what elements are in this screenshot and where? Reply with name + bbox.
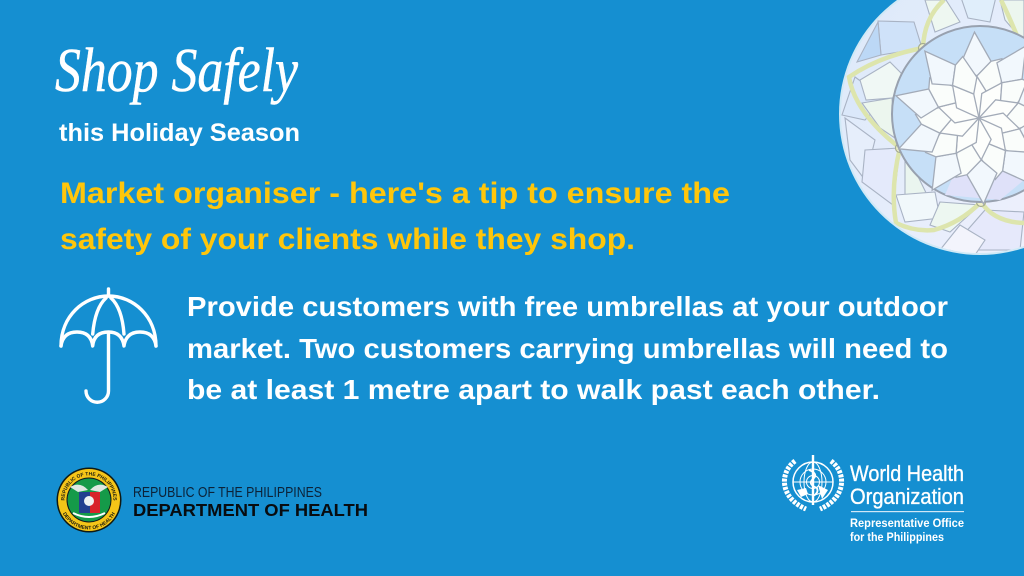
subtitle: this Holiday Season [59, 119, 300, 147]
Department of Health wordmark [133, 485, 368, 520]
body text: be at least 1 metre apart to walk past each other. [187, 374, 880, 405]
heading: market organiser tip: safety of your clients while they shop. [60, 223, 635, 256]
WHO wordmark: World Health [850, 461, 964, 486]
inner circle [892, 26, 1024, 202]
decorative stained glass rosette [836, 0, 1024, 260]
WHO wordmark [850, 461, 964, 544]
title: Shop Safely: Shop Safely [55, 37, 298, 105]
icon: Department of Health seal: DEPARTMENT OF HEALTH [63, 512, 115, 530]
icon: Department of Health seal: REPUBLIC OF THE PHILIPPINES [61, 472, 117, 500]
Department of Health wordmark: DEPARTMENT OF HEALTH [133, 500, 368, 520]
icon: WHO emblem [784, 455, 842, 509]
WHO wordmark: Representative Office [850, 518, 964, 530]
lobed bands [849, 0, 1024, 230]
star petals [895, 30, 1024, 205]
body text: Provide customers with free umbrellas at your outdoor [187, 291, 948, 322]
icon: umbrella [61, 289, 156, 402]
WHO wordmark: Organization [850, 484, 964, 509]
body text [187, 291, 948, 405]
heading: market organiser tip: Market organiser - here's a tip to ensure the [60, 177, 730, 210]
band nodes [894, 42, 986, 208]
WHO wordmark: for the Philippines [850, 532, 944, 544]
Department of Health wordmark: REPUBLIC OF THE PHILIPPINES [133, 485, 322, 501]
outer glass panes [842, 0, 1024, 255]
icon: Department of Health seal [56, 468, 122, 532]
heading: market organiser tip [60, 177, 730, 256]
body text: market. Two customers carrying umbrellas will need to [187, 333, 948, 364]
